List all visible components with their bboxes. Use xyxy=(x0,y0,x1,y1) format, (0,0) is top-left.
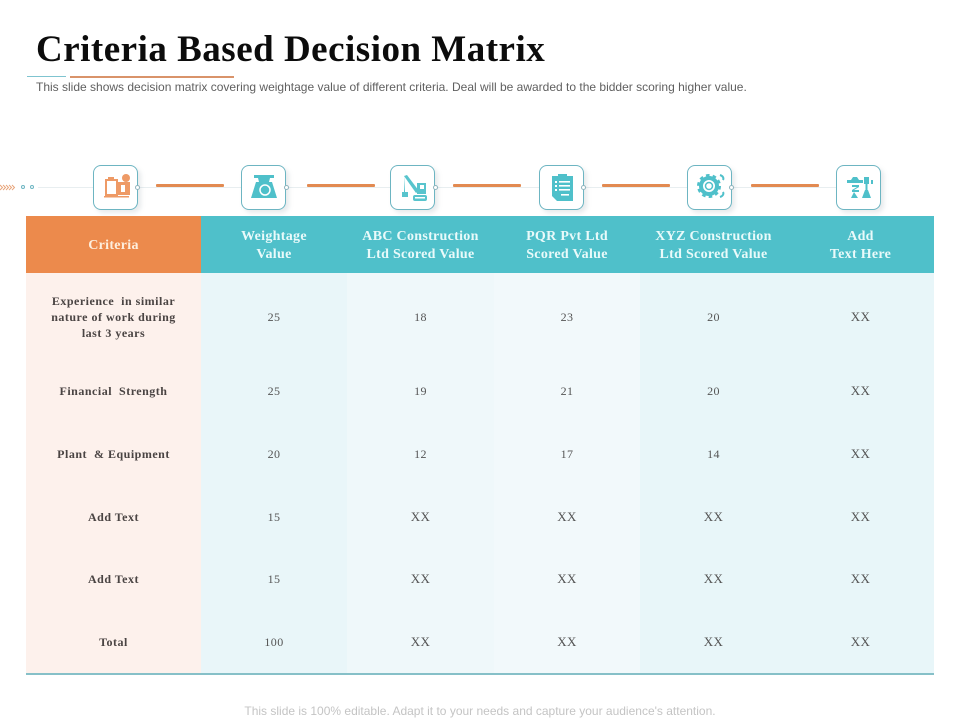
column backgrounds xyxy=(26,273,934,673)
subtitle: This slide shows decision matrix covering weightage value of different criteria. Deal will be awarded to the bidder scoring higher value. xyxy=(36,80,747,94)
column: XYZ values: XX xyxy=(704,509,723,524)
header: Weightage Value xyxy=(241,228,307,262)
icon: weighing scale xyxy=(241,165,286,210)
header: ABC xyxy=(362,228,479,262)
header: Criteria: Criteria xyxy=(88,238,139,252)
header: XYZ xyxy=(655,228,772,262)
icon: crane excavator xyxy=(390,165,435,210)
row labels: Add Text xyxy=(88,510,139,524)
column: Add values: XX xyxy=(851,509,870,524)
connector dots xyxy=(135,185,734,190)
icon: construction tools xyxy=(836,165,881,210)
column: weightage values: 15 xyxy=(268,510,280,524)
column: PQR values: 17 xyxy=(561,446,573,460)
row labels: Add Text xyxy=(88,572,139,586)
title: Criteria Based Decision Matrix xyxy=(36,29,545,70)
column: PQR values: XX xyxy=(557,509,577,524)
row labels xyxy=(51,294,176,649)
header: PQR: PQR Pvt Ltd xyxy=(526,228,608,244)
header: Criteria xyxy=(26,216,201,273)
connector bars xyxy=(156,184,819,187)
column: Add values: XX xyxy=(851,446,870,461)
column: weightage values xyxy=(264,310,284,648)
column: PQR values: 21 xyxy=(561,384,573,398)
header: ABC: ABC Construction xyxy=(362,228,479,244)
row labels: Financial Strength xyxy=(60,384,167,398)
column: Add values: XX xyxy=(851,309,870,324)
column: weightage values: 15 xyxy=(268,572,280,586)
header: XYZ: XYZ Construction xyxy=(655,228,772,244)
header: PQR xyxy=(526,228,608,262)
header: ABC: Ltd Scored Value xyxy=(366,246,474,262)
header: Weightage Value: Weightage xyxy=(241,228,307,244)
column: XYZ values: 20 xyxy=(707,384,720,398)
column: ABC values: 18 xyxy=(414,310,427,324)
column: ABC values: XX xyxy=(411,571,430,586)
chevrons and dots xyxy=(0,184,34,190)
header: Add Text Here: Add xyxy=(847,228,874,244)
header: Add Text Here xyxy=(830,228,891,262)
icon timeline xyxy=(38,187,836,188)
column: ABC values: XX xyxy=(411,634,430,649)
column: ABC values: 12 xyxy=(414,446,427,460)
icon: machine with gear xyxy=(93,165,138,210)
column: weightage values: 25 xyxy=(268,384,280,398)
column: Add values xyxy=(851,309,870,649)
row labels: nature of work during xyxy=(51,310,176,324)
column: XYZ values: XX xyxy=(704,634,723,649)
column: XYZ values: 14 xyxy=(707,446,720,460)
column: XYZ values xyxy=(704,310,723,649)
row labels: last 3 years xyxy=(82,326,145,340)
decision matrix table xyxy=(26,273,934,675)
header row teal xyxy=(201,216,934,273)
column: weightage values: 25 xyxy=(268,310,280,324)
header: PQR: Scored Value xyxy=(526,246,608,262)
column: ABC values: 19 xyxy=(414,384,427,398)
icon: clipboard checklist xyxy=(539,165,584,210)
header: XYZ: Ltd Scored Value xyxy=(659,246,768,262)
row labels: Plant & Equipment xyxy=(57,447,170,461)
footer note: This slide is 100% editable. Adapt it to your needs and capture your audience's attention. xyxy=(244,704,716,718)
column: XYZ values: XX xyxy=(704,571,723,586)
row labels: Total xyxy=(99,635,128,649)
column: ABC values xyxy=(411,310,430,649)
column: PQR values xyxy=(557,310,577,649)
bottom rule xyxy=(26,673,934,674)
title underline accent xyxy=(27,76,234,78)
row labels: Experience in similar xyxy=(52,294,175,308)
column: Add values: XX xyxy=(851,571,870,586)
header: Add Text Here: Text Here xyxy=(830,246,891,262)
column: Add values: XX xyxy=(851,634,870,649)
column: Add values: XX xyxy=(851,383,870,398)
column: XYZ values: 20 xyxy=(707,310,720,324)
column: weightage values: 100 xyxy=(264,634,284,648)
column: weightage values: 20 xyxy=(268,446,280,460)
column: ABC values: XX xyxy=(411,509,430,524)
icon: gear and wrench xyxy=(687,165,732,210)
header: Weightage Value: Value xyxy=(256,246,292,262)
column: PQR values: XX xyxy=(557,571,577,586)
column: PQR values: XX xyxy=(557,634,577,649)
column: PQR values: 23 xyxy=(561,310,573,324)
